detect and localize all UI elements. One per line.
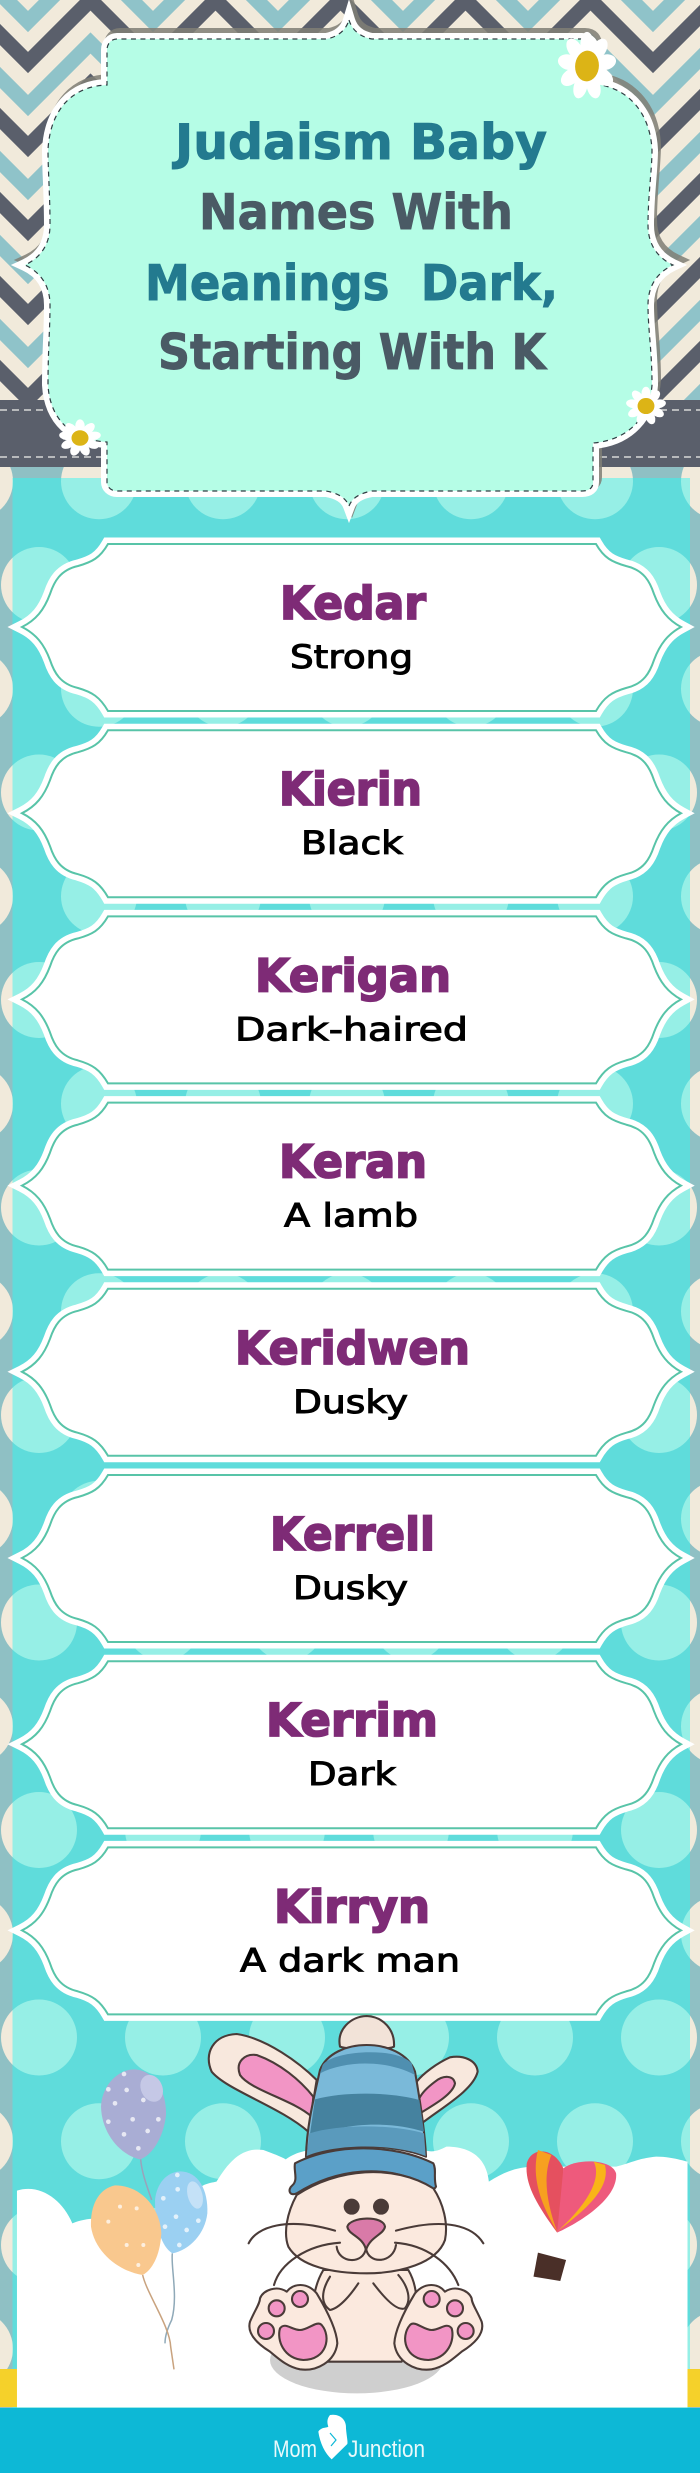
card: Kerigan: Kerigan: [255, 949, 451, 1002]
illustration scene: [17, 2016, 688, 2407]
card: Kirryn: Kirryn: [274, 1880, 430, 1933]
card: Kerrim: Dark: [308, 1755, 397, 1793]
card: Kirryn: [22, 1847, 681, 2014]
icon: daisy bottom right: [625, 387, 667, 426]
card: Kerrell: Dusky: [293, 1569, 408, 1607]
card: Kedar: [22, 544, 681, 711]
title: Names With: [199, 184, 513, 241]
card: Kerrell: Kerrell: [270, 1508, 435, 1561]
card: Keridwen: [22, 1289, 681, 1456]
card: Kedar: Kedar: [280, 577, 427, 630]
title: [145, 114, 558, 381]
heart hot-air balloon: [527, 2150, 616, 2281]
title plaque: [25, 15, 676, 506]
card: Kierin: Kierin: [279, 763, 422, 816]
card: Keridwen: Dusky: [293, 1383, 408, 1421]
card: Keran: A lamb: [284, 1197, 418, 1235]
card: Kierin: [22, 730, 681, 897]
background: dark stitched band: [0, 400, 700, 467]
card: Kerrim: [22, 1661, 681, 1828]
left foot: [249, 2285, 337, 2370]
background: chevron pattern: [0, 0, 700, 400]
card: Kirryn: A dark man: [240, 1941, 460, 1979]
card: Kerigan: Dark-haired: [235, 1010, 468, 1048]
card: Kerrell: [22, 1475, 681, 1642]
title: Starting With K: [158, 324, 548, 381]
icon: daisy bottom left: [58, 419, 102, 457]
footer bar: [0, 2408, 700, 2473]
icon: daisy top right: [557, 32, 617, 101]
card: Keran: [22, 1103, 681, 1270]
logo: MomJunction: [273, 2415, 425, 2463]
right foot: [394, 2285, 482, 2370]
logo: MomJunction: Mom: [273, 2436, 317, 2463]
card: Keridwen: Keridwen: [235, 1322, 470, 1375]
card: Kerigan: [22, 916, 681, 1083]
logo: MomJunction: Junction: [348, 2436, 425, 2463]
title: Judaism Baby: [172, 114, 547, 171]
card: Keran: Keran: [279, 1136, 427, 1189]
title: Meanings Dark,: [145, 255, 558, 312]
yellow edge tabs: [0, 2369, 700, 2407]
rabbit: [209, 2016, 483, 2393]
card: Kedar: Strong: [290, 638, 413, 676]
white clouds: [17, 2147, 688, 2407]
card: Kierin: Black: [301, 824, 404, 862]
background: polka dot panel: [0, 467, 700, 2408]
balloons: [91, 2069, 207, 2369]
card: Kerrim: Kerrim: [266, 1694, 438, 1747]
